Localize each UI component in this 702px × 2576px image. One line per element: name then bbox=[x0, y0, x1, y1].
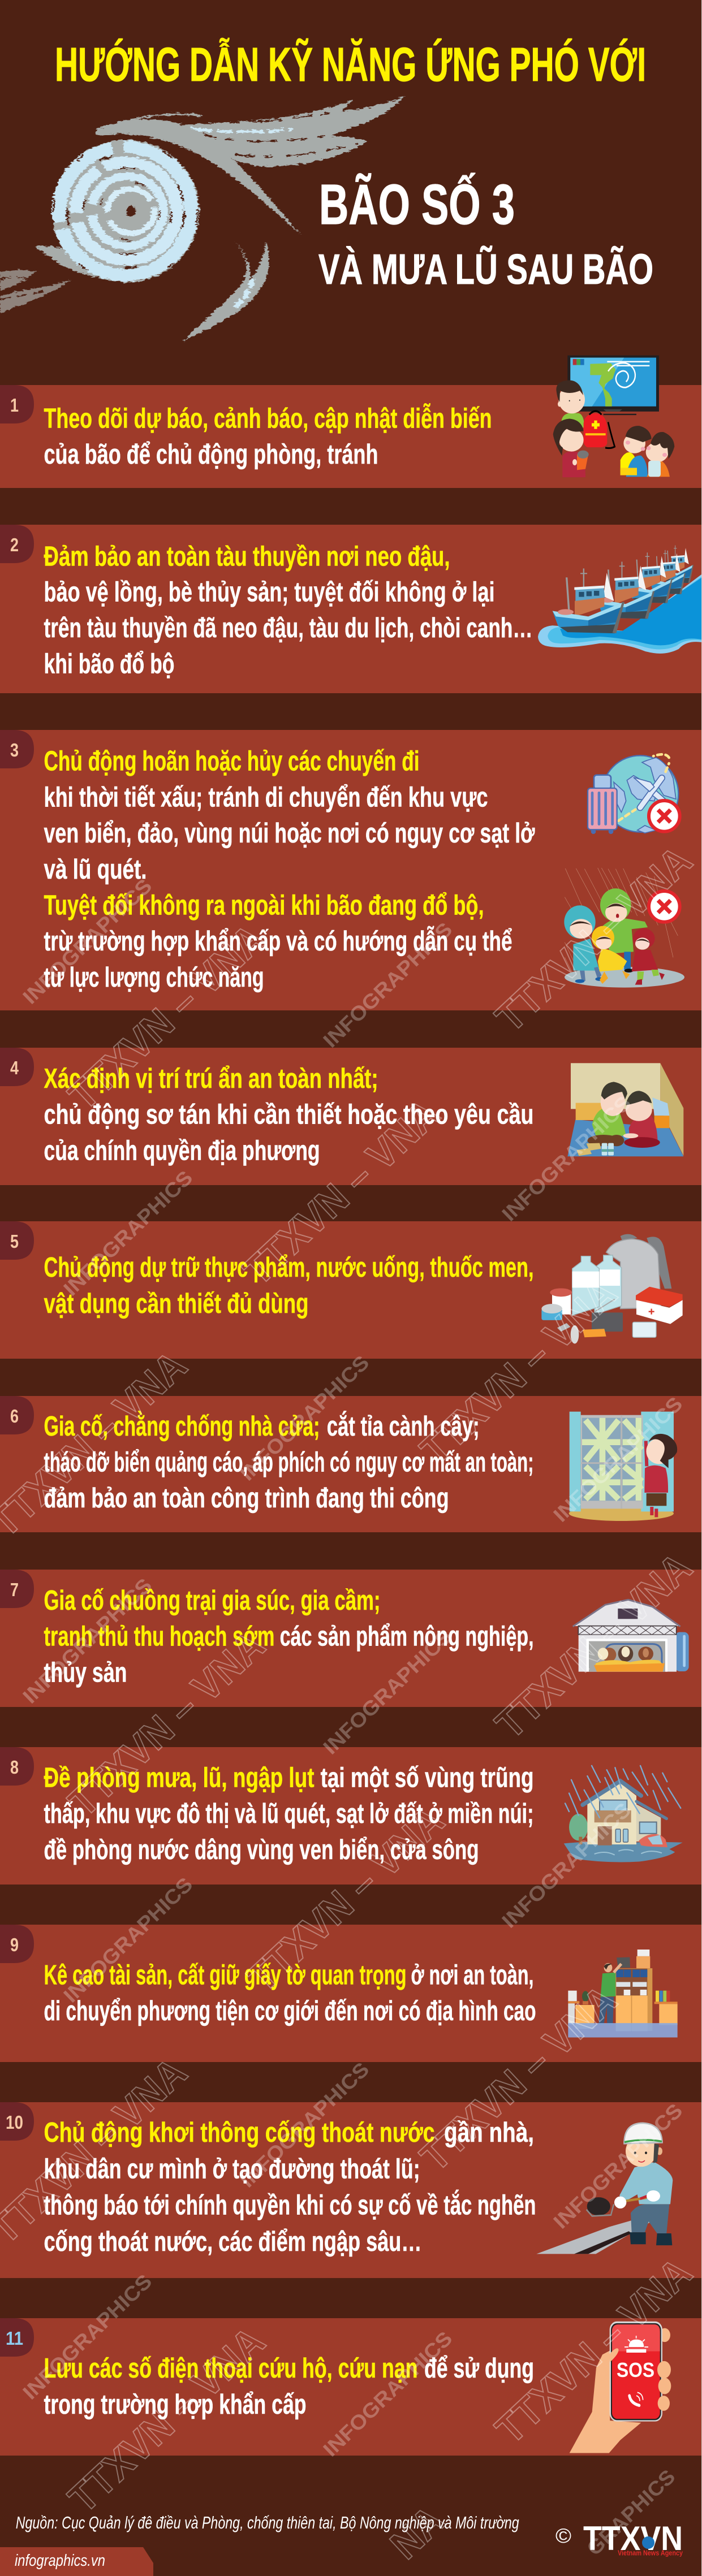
panel: step 3 bbox=[0, 730, 702, 1010]
text: step 5: vật dụng cần thiết đủ dùng bbox=[44, 1289, 309, 1319]
text: step 8: tại một số vùng trũng bbox=[321, 1762, 534, 1793]
text: step 9: Kê cao tài sản, cất giữ giấy tờ quan trọng bbox=[44, 1960, 406, 1990]
text: step 4: của chính quyền địa phương bbox=[44, 1135, 320, 1166]
text: step 6 bbox=[44, 1411, 534, 1514]
text: step 6: Gia cố, chằng chống nhà cửa; bbox=[44, 1411, 320, 1442]
text: step 7 bbox=[44, 1585, 534, 1688]
text: step 4: chủ động sơ tán khi cần thiết hoặc theo yêu cầu bbox=[44, 1100, 534, 1130]
number badge 4: 4 bbox=[10, 1057, 19, 1078]
watermark: repeating agency marks: TTXVN – VNA bbox=[412, 1270, 625, 1473]
watermark: repeating agency marks: TTXVN – VNA bbox=[239, 1797, 453, 2001]
watermark: repeating agency marks: TTXVN – VNA bbox=[60, 2318, 273, 2522]
watermark: repeating agency marks bbox=[0, 837, 700, 2568]
panel: step 7 bbox=[0, 1570, 702, 1707]
panel: step 4 bbox=[0, 1048, 702, 1185]
panel: step 11 bbox=[0, 2318, 702, 2456]
number badge 10 bbox=[0, 2102, 34, 2141]
number badge 8: 8 bbox=[10, 1757, 19, 1778]
text: step 10: gần nhà, bbox=[444, 2117, 534, 2148]
watermark: repeating agency marks: INFOGRAPHICS bbox=[59, 1873, 197, 2007]
text: step 9: ở nơi an toàn, bbox=[411, 1960, 534, 1990]
icon: emergency kit with water, radio, first aid bbox=[541, 1234, 683, 1343]
panel: step 2 bbox=[0, 525, 702, 693]
icon: man storing documents high in flooded office bbox=[568, 1950, 678, 2037]
text: step 3: Chủ động hoãn hoặc hủy các chuyến đi bbox=[44, 746, 420, 777]
watermark: repeating agency marks: INFOGRAPHICS bbox=[235, 1351, 373, 1485]
watermark: repeating agency marks: INFOGRAPHICS bbox=[497, 1798, 635, 1933]
number badge 5 bbox=[0, 1221, 34, 1260]
number badge 5: 5 bbox=[10, 1231, 19, 1252]
number badge 10: 10 bbox=[6, 2112, 23, 2133]
watermark: repeating agency marks: INFOGRAPHICS bbox=[18, 2270, 156, 2404]
icon: couple sheltering indoors bbox=[567, 1063, 683, 1156]
heading: storm number: BÃO SỐ 3 bbox=[319, 173, 515, 236]
watermark: repeating agency marks: GRAPHICS bbox=[582, 2465, 679, 2560]
text: step 11: để sử dụng bbox=[424, 2353, 534, 2384]
icon: family in raincoats in the rain bbox=[564, 868, 684, 988]
text: step 2: bảo vệ lồng, bè thủy sản; tuyệt đối không ở lại bbox=[44, 577, 494, 608]
number badge 9 bbox=[0, 1925, 34, 1963]
logo: TTXVN: © bbox=[555, 2524, 571, 2547]
icon: no travel, globe with suitcase and plane bbox=[588, 754, 680, 834]
icon: hand holding SOS phone bbox=[570, 2322, 671, 2453]
number badge 2 bbox=[0, 525, 34, 563]
text: step 11: trong trường hợp khẩn cấp bbox=[44, 2389, 307, 2420]
footer strip bbox=[0, 2547, 153, 2563]
number badge 6: 6 bbox=[10, 1406, 19, 1427]
text: step 3 bbox=[44, 746, 535, 993]
text: step 1 bbox=[44, 404, 492, 470]
text: step 6: đảm bảo an toàn công trình đang thi công bbox=[44, 1483, 449, 1514]
text: step 10 bbox=[44, 2117, 536, 2257]
number badge 7: 7 bbox=[10, 1579, 19, 1600]
text: step 7: tranh thủ thu hoạch sớm bbox=[44, 1622, 275, 1652]
text: step 10: cống thoát nước, các điểm ngập sâu… bbox=[44, 2227, 422, 2257]
panel: step 6 bbox=[0, 1396, 702, 1532]
text: step 9 bbox=[44, 1960, 536, 2026]
text: step 3: từ lực lượng chức năng bbox=[44, 962, 264, 993]
text: step 2 bbox=[44, 542, 533, 680]
number badge 8 bbox=[0, 1747, 34, 1786]
number badge 6 bbox=[0, 1396, 34, 1434]
watermark: repeating agency marks: INFOGRAPHICS bbox=[59, 1166, 197, 1300]
number badge 2: 2 bbox=[10, 534, 19, 555]
watermark: repeating agency marks: TTXVN – VNA bbox=[60, 1622, 273, 1826]
website credit: infographics.vn bbox=[15, 2552, 105, 2570]
icon: family watching storm news on TV bbox=[553, 356, 674, 477]
text: step 8: đề phòng nước dâng vùng ven biển, cửa sông bbox=[44, 1835, 479, 1865]
text: step 8: Đề phòng mưa, lũ, ngập lụt bbox=[44, 1762, 315, 1793]
number badge 7 bbox=[0, 1570, 34, 1608]
watermark: repeating agency marks: TTXVN – VNA bbox=[235, 1091, 448, 1294]
text: step 3: Tuyệt đối không ra ngoài khi bão đang đổ bộ, bbox=[44, 891, 484, 921]
icon: hand holding SOS phone: SOS bbox=[617, 2358, 654, 2381]
text: step 3: khi thời tiết xấu; tránh di chuyển đến khu vực bbox=[44, 782, 488, 812]
text: step 2: khi bão đổ bộ bbox=[44, 649, 174, 680]
text: step 4 bbox=[44, 1064, 534, 1166]
footer lower strip bbox=[0, 2563, 153, 2576]
text: step 7: các sản phẩm nông nghiệp, bbox=[280, 1622, 534, 1652]
text: step 11: Lưu các số điện thoại cứu hộ, cứu nạn bbox=[44, 2353, 417, 2384]
text: step 3: ven biển, đảo, vùng núi hoặc nơi có nguy cơ sạt lở bbox=[44, 818, 535, 849]
watermark: repeating agency marks: INFOGRAPHICS bbox=[18, 1574, 156, 1708]
watermark: repeating agency marks: INFOGRAPHICS bbox=[497, 1091, 635, 1226]
text: step 2: Đảm bảo an toàn tàu thuyền nơi neo đậu, bbox=[44, 542, 450, 572]
icon: hurricane swirl bbox=[0, 96, 405, 341]
watermark: repeating agency marks: INFOGRAPHICS bbox=[318, 2327, 456, 2461]
logo: TTXVN: TTXVN bbox=[583, 2519, 683, 2557]
text: step 6: cắt tỉa cành cây; bbox=[327, 1411, 480, 1442]
text: step 7: thủy sản bbox=[44, 1657, 127, 1688]
text: step 5 bbox=[44, 1252, 534, 1319]
panel: step 9 bbox=[0, 1925, 702, 2062]
number badge 3: 3 bbox=[10, 740, 19, 760]
panel: step 1 bbox=[0, 356, 702, 488]
watermark: repeating agency marks: TTXVN – VNA bbox=[412, 1977, 625, 2180]
number badge 1: 1 bbox=[10, 395, 19, 416]
text: step 3: trừ trường hợp khẩn cấp và có hướng dẫn cụ thể bbox=[44, 926, 512, 957]
watermark: repeating agency marks: INFOGRAPHICS bbox=[318, 1624, 456, 1759]
number badge 4 bbox=[0, 1048, 34, 1086]
text: step 1: của bão để chủ động phòng, tránh bbox=[44, 439, 378, 470]
number badge 11: 11 bbox=[6, 2328, 23, 2349]
icon: flooded house in rain bbox=[564, 1766, 683, 1862]
icon: worker clearing drain with shovel bbox=[536, 2123, 673, 2254]
panel: step 5 bbox=[0, 1221, 702, 1359]
source note: Nguồn: Cục Quản lý đê điều và Phòng, chống thiên tai, Bộ Nông nghiệp và Môi trường bbox=[16, 2513, 519, 2532]
icon: moored fishing boats on water bbox=[538, 546, 702, 654]
text: step 10: Chủ động khơi thông cống thoát nước bbox=[44, 2117, 434, 2148]
watermark: repeating agency marks: TTXVN – VNA bbox=[60, 915, 273, 1119]
watermark: repeating agency marks: INFOGRAPHICS bbox=[18, 874, 156, 1009]
number badge 9: 9 bbox=[10, 1934, 19, 1955]
text: step 10: khu dân cư mình ở tạo đường thoát lũ; bbox=[44, 2154, 420, 2184]
panel: step 8 bbox=[0, 1747, 702, 1885]
number badge 3 bbox=[0, 730, 34, 768]
text: step 3: và lũ quét. bbox=[44, 854, 147, 885]
panel: step 10 bbox=[0, 2102, 702, 2278]
icon: livestock barn bbox=[573, 1600, 689, 1672]
watermark: repeating agency marks: INFOGRAPHICS bbox=[549, 2099, 687, 2233]
number badge 11 bbox=[0, 2318, 34, 2357]
text: step 8 bbox=[44, 1762, 534, 1865]
number badge 1 bbox=[0, 385, 34, 423]
logo: TTXVN: Vietnam News Agency bbox=[618, 2549, 683, 2557]
text: step 11 bbox=[44, 2353, 534, 2420]
icon: woman at taped window bbox=[569, 1412, 677, 1521]
watermark: repeating agency marks: INFOGRAPHICS bbox=[549, 1392, 687, 1527]
watermark: repeating agency marks: INFOGRAPHICS bbox=[318, 918, 456, 1052]
text: step 7: Gia cố chuồng trại gia súc, gia cầm; bbox=[44, 1585, 380, 1616]
watermark: repeating agency marks: INFOGRAPHICS bbox=[235, 2058, 373, 2192]
watermark: repeating agency marks: NA bbox=[382, 2497, 453, 2568]
text: step 4: Xác định vị trí trú ẩn an toàn nhất; bbox=[44, 1064, 378, 1094]
text: step 1: Theo dõi dự báo, cảnh báo, cập nhật diễn biến bbox=[44, 404, 492, 434]
